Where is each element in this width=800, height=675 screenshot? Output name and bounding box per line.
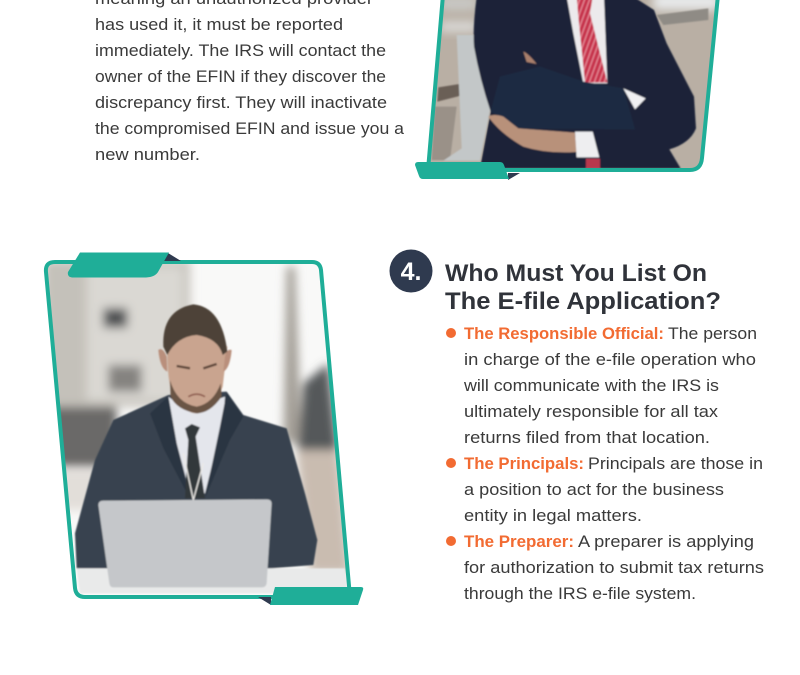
text block: EFIN reporting paragraph: the compromised EFIN and issue you a: [95, 120, 405, 138]
list item: the responsible official: returns filed from that location.: [464, 429, 710, 447]
list item: the responsible official: in charge of the e-file operation who: [464, 351, 756, 369]
list item: the preparer: for authorization to submit tax returns: [464, 559, 764, 577]
list item: the preparer: A preparer is applying: [578, 533, 754, 551]
list item: the principals: [446, 455, 763, 525]
list item: the responsible official: ultimately responsible for all tax: [464, 403, 719, 421]
text block: EFIN reporting paragraph: new number.: [95, 146, 200, 164]
badge: number 4: 4.: [401, 258, 421, 286]
text block: EFIN reporting paragraph: has used it, it must be reported: [95, 16, 343, 34]
list item: the preparer: through the IRS e-file system.: [464, 585, 696, 603]
heading: who must you list: The E-file Application?: [445, 288, 721, 315]
list item: the responsible official: [446, 325, 757, 447]
frame: teal photo border: [428, 0, 718, 170]
frame: teal photo border: [46, 262, 350, 597]
icon: corner fold: [508, 173, 520, 180]
heading: who must you list: Who Must You List On: [445, 260, 707, 287]
text block: EFIN reporting paragraph: [95, 0, 405, 164]
tab: teal corner ribbon: [415, 162, 509, 179]
text block: EFIN reporting paragraph: owner of the EFIN if they discover the: [95, 68, 386, 86]
list item: the responsible official: The Responsible Official:: [464, 325, 664, 343]
heading: who must you list: [445, 260, 721, 315]
icon: top corner fold: [163, 253, 181, 261]
tab: bottom teal ribbon: [270, 587, 363, 605]
photo: businessman at laptop: [43, 252, 363, 605]
text block: EFIN reporting paragraph: immediately. The IRS will contact the: [95, 42, 386, 60]
text block: EFIN reporting paragraph: discrepancy first. They will inactivate: [95, 94, 387, 112]
list item: the principals: Principals are those in: [588, 455, 763, 473]
tab: top teal ribbon: [68, 252, 169, 278]
list item: the principals: a position to act for the business: [464, 481, 724, 499]
list item: the principals: The Principals:: [464, 455, 584, 473]
list item: the responsible official: will communicate with the IRS is: [463, 377, 719, 395]
photo: businessman with crossed arms: [415, 0, 727, 180]
list item: the preparer: [446, 533, 764, 603]
list item: the responsible official: The person: [668, 325, 757, 343]
list item: the principals: entity in legal matters.: [464, 507, 642, 525]
icon: bottom corner fold: [258, 597, 271, 605]
badge: number 4: [390, 250, 432, 292]
list item: the preparer: The Preparer:: [464, 533, 574, 551]
